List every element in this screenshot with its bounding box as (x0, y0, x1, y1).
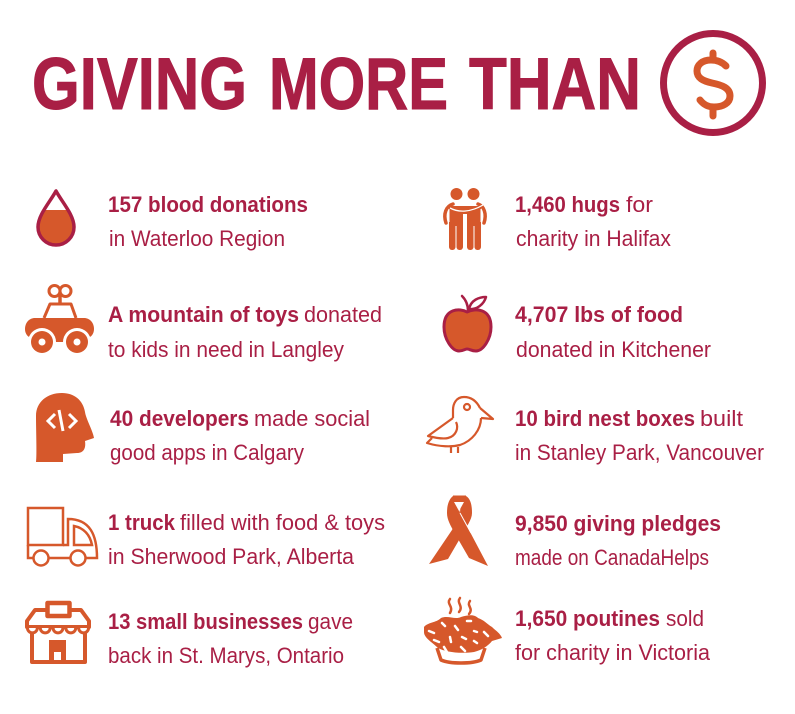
icon: storefront (26, 603, 90, 662)
text: small businesses: gave (308, 609, 353, 634)
text: toys: A mountain of toys (108, 302, 299, 327)
item: truck (28, 508, 385, 569)
item: hugs (445, 188, 671, 251)
item: blood donations (38, 191, 308, 251)
text: toys: to kids in need in Langley (108, 337, 344, 362)
item: developers (36, 393, 370, 465)
text: developers: good apps in Calgary (110, 440, 304, 465)
icon: truck (28, 508, 97, 566)
icon: bird (427, 397, 493, 453)
text: truck: filled with food & toys (180, 510, 385, 535)
item: small businesses (26, 603, 353, 668)
text: poutines (515, 606, 711, 665)
text: developers (110, 406, 370, 465)
text: small businesses (108, 609, 353, 668)
item: toys (25, 286, 382, 362)
text: hugs: charity in Halifax (516, 226, 671, 251)
title: GIVING (32, 44, 247, 125)
text: toys (108, 302, 382, 362)
icon: apple (444, 296, 491, 351)
icon: toy car (25, 286, 94, 356)
text: toys: donated (304, 302, 382, 327)
text: giving pledges (515, 511, 721, 570)
text: bird nest boxes: built (700, 406, 743, 431)
text: bird nest boxes (515, 406, 764, 465)
icon: head with code (36, 393, 94, 462)
text: bird nest boxes: 10 bird nest boxes (515, 406, 695, 431)
text: hugs: 1,460 hugs (515, 192, 620, 217)
title (32, 44, 641, 125)
text: giving pledges: 9,850 giving pledges (515, 511, 721, 536)
icon: two people hugging (445, 188, 485, 251)
text: small businesses: back in St. Marys, Ontario (108, 643, 344, 668)
text: truck (108, 510, 385, 569)
title: MORE (269, 44, 448, 125)
text: bird nest boxes: in Stanley Park, Vancouver (515, 440, 764, 465)
icon: poutine bowl (424, 598, 502, 663)
text: poutines: 1,650 poutines (515, 606, 660, 631)
item: giving pledges (429, 496, 721, 570)
text: truck: in Sherwood Park, Alberta (108, 544, 355, 569)
text: blood donations: 157 blood donations (108, 192, 308, 217)
text: blood donations: in Waterloo Region (109, 226, 285, 251)
text: poutines: for charity in Victoria (515, 640, 711, 665)
title: THAN (469, 44, 641, 125)
text: truck: 1 truck (108, 510, 176, 535)
icon: blood drop (38, 191, 74, 245)
text: developers: made social (254, 406, 370, 431)
text: hugs: for (626, 192, 653, 217)
text: poutines: sold (666, 606, 704, 631)
icon: ribbon (429, 496, 488, 566)
text: small businesses: 13 small businesses (108, 609, 303, 634)
text: hugs (515, 192, 671, 251)
item: poutines (424, 598, 711, 665)
item: bird nest boxes (427, 397, 764, 465)
text: food: 4,707 lbs of food (515, 302, 683, 327)
text: giving pledges: made on CanadaHelps (515, 545, 709, 570)
text: developers: 40 developers (110, 406, 249, 431)
text: blood donations (108, 192, 308, 251)
icon: dollar coin (664, 34, 762, 132)
text: food: donated in Kitchener (516, 337, 711, 362)
item: food (444, 296, 711, 362)
text: food (515, 302, 711, 362)
